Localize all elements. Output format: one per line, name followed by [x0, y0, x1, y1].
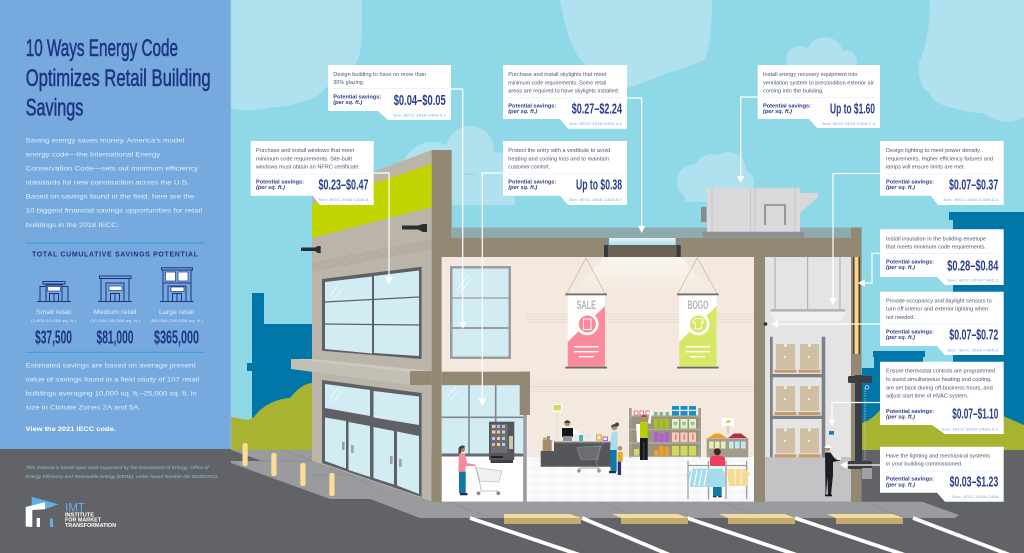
card: insulation: See: IECC 2018 C402.2 — [947, 278, 999, 282]
warehouse shelving with boxes — [770, 337, 825, 457]
card: occupancy sensors: (per sq. ft.) — [886, 335, 915, 341]
savings: large retail: Large retail — [159, 310, 194, 316]
arrow: thermostat connector — [828, 402, 880, 427]
arrow: insulation connector — [858, 253, 880, 287]
card: commissioning: Potential savings: — [886, 476, 934, 482]
card: windows: See: IECC 2018 C402.4 — [318, 197, 369, 202]
clothing racks and shopper — [685, 448, 750, 499]
card: vestibule: Protect the entry with a vestibule to avoid — [508, 148, 610, 154]
title: 10 Ways Energy Code — [26, 35, 178, 62]
customer and child with cart — [577, 422, 623, 475]
card: insulation — [880, 229, 1004, 285]
icon: small retail — [37, 282, 71, 302]
banner: bogo — [677, 258, 719, 368]
intro text: 10 biggest financial savings opportunities for retail — [26, 208, 203, 215]
card: thermostat controls: (per sq. ft.) — [886, 414, 915, 420]
banner: sale — [565, 258, 607, 368]
produce stand — [707, 418, 748, 457]
intro text: Saving energy saves money. America’s model — [26, 137, 185, 144]
card: thermostat controls: to avoid simultaneous heating and cooling, — [886, 377, 992, 383]
card: commissioning: (per sq. ft.) — [886, 482, 915, 488]
card: skylights: See: IECC 2018 C402.4.2 — [569, 121, 623, 126]
icon: thermostat — [829, 431, 834, 435]
logo: IMT: TRANSFORMATION — [65, 523, 116, 529]
bollards — [242, 443, 334, 496]
savings: large retail — [150, 310, 203, 348]
card: lighting: lamps will ensure limits are met. — [886, 164, 965, 170]
arrow: vestibule connector — [478, 173, 503, 406]
intro text — [26, 137, 203, 229]
card: glazing: (per sq. ft.) — [333, 100, 363, 106]
card: commissioning: See: IECC 2018 C408 — [952, 494, 999, 499]
savings: medium retail: Medium retail — [94, 310, 136, 316]
intro text: Based on savings found in the field, here are the — [26, 194, 195, 201]
exterior wall column with insulation — [848, 239, 872, 502]
card: glazing: Potential savings: — [333, 94, 382, 100]
card: energy recovery: Install energy recovery equipment into — [763, 72, 857, 78]
warehouse room — [754, 257, 851, 502]
card: occupancy sensors: turn off interior and exterior lighting when — [886, 307, 988, 313]
card: skylights: areas are required to have skylights installed. — [508, 88, 619, 94]
methodology text: buildings averaging 10,000 sq. ft.–25,000 sq. ft. in — [26, 390, 197, 398]
card: skylights: $0.27–$2.24 — [572, 100, 622, 117]
card: energy recovery: ventilation system to precondition exterior air — [763, 80, 874, 86]
card: windows: minimum code requirements. Site-built — [256, 156, 353, 162]
card: commissioning — [880, 447, 1004, 502]
savings: small retail: Small retail — [36, 310, 71, 316]
savings: large retail: $365,000 — [154, 328, 199, 348]
arrow: occupancy sensors connector — [771, 320, 880, 328]
banner: sale: SALE — [576, 298, 596, 312]
arrow: glazing connector — [451, 89, 466, 329]
card: thermostat controls: See: IECC 2018 C403.4.1 — [941, 426, 999, 432]
savings: small retail: $37,500 — [35, 328, 72, 348]
arrow: windows connector — [374, 173, 393, 284]
card: skylights: Purchase and install skylights that meet — [508, 72, 607, 78]
divider rule — [26, 242, 204, 244]
heading: total cumulative savings potential: TOTAL CUMULATIVE SAVINGS POTENTIAL — [32, 252, 199, 258]
card: occupancy sensors: Provide occupancy and daylight sensors to — [886, 299, 992, 305]
card: windows: windows must obtain an NFRC certificate. — [255, 164, 360, 170]
card: skylights: minimum code requirements. Some retail — [508, 80, 606, 86]
intro text: Conservation Code—sets out minimum efficiency — [26, 166, 199, 173]
arrow: commissioning connector — [840, 461, 880, 469]
building: left facade — [312, 150, 452, 502]
title — [26, 35, 211, 122]
sky background — [231, 0, 1024, 460]
ground and parking lot — [231, 450, 1024, 553]
card: commissioning: Have the lighting and mechanical systems — [886, 453, 990, 459]
card: windows: Purchase and install windows that meet — [256, 148, 355, 154]
savings: small retail: (1,000-10,000 sq. ft.) — [31, 319, 76, 323]
lower storefront window and doors — [322, 380, 422, 497]
skylight — [573, 238, 712, 293]
link text: View the 2021 IECC code. — [26, 426, 116, 433]
card: glazing: Design building to have no more than — [333, 72, 426, 78]
left panel — [0, 0, 231, 553]
card: thermostat controls: Ensure thermostat controls are programmed — [886, 369, 995, 375]
checkout counter and cashier — [541, 404, 612, 467]
card: occupancy sensors: See: IECC 2018 C405.2 — [947, 348, 999, 352]
intro text: standards for new construction across the U.S. — [26, 180, 189, 187]
card: vestibule: Up to $0.38 — [576, 176, 622, 193]
arrow: skylight connector — [627, 98, 645, 233]
parking stripes — [470, 518, 1010, 553]
skyline: distant buildings — [247, 212, 1024, 450]
card: insulation: (per sq. ft.) — [886, 265, 915, 271]
card: vestibule — [503, 141, 627, 205]
roof parapet — [441, 228, 862, 257]
vending machine — [489, 422, 514, 463]
parking curbs — [504, 514, 903, 524]
card: energy recovery — [758, 65, 880, 128]
card: insulation: that meets minimum code requirements. — [886, 245, 986, 251]
card: skylights — [503, 65, 627, 129]
footnote — [26, 465, 219, 479]
card: windows: $0.23–$0.47 — [318, 176, 368, 193]
shopper with cart — [458, 445, 502, 495]
title: Savings — [26, 94, 83, 122]
card: energy recovery: See: IECC 2018 C403.7.4 — [822, 121, 876, 126]
card: vestibule: customer comfort. — [508, 164, 550, 170]
logo: IMT — [26, 497, 116, 529]
upper storefront window — [322, 267, 422, 359]
card: energy recovery: coming into the building. — [763, 88, 824, 94]
awning — [291, 359, 432, 385]
savings: medium retail — [90, 310, 140, 348]
card: skylights: (per sq. ft.) — [508, 109, 538, 115]
footnote: Energy Efficiency and Renewable Energy (EERE), under Award Number DE-EE0007619. — [26, 474, 219, 479]
arrow: lighting connector — [829, 174, 880, 306]
arrow: energy recovery connector — [737, 97, 758, 183]
card: insulation: Install insulation in the building envelope — [886, 236, 986, 242]
banner: bogo: BOGO — [688, 298, 708, 312]
card: occupancy sensors: not needed. — [886, 315, 915, 321]
ground floor vestibule — [442, 372, 530, 502]
card: vestibule: heating and cooling loss and to maintain — [508, 156, 609, 162]
card: thermostat controls: Potential savings: — [886, 409, 934, 415]
card: lighting: (per sq. ft.) — [886, 185, 915, 191]
card: windows — [251, 141, 374, 205]
wall lamps — [301, 224, 427, 253]
sidewalk — [231, 450, 959, 518]
card: occupancy sensors: Potential savings: — [886, 330, 934, 336]
savings: large retail: (50,000-200,000 sq. ft.) — [150, 319, 203, 323]
savings: medium retail: (10,000-50,000 sq. ft.) — [90, 319, 140, 323]
store interior wall — [442, 257, 754, 457]
card: thermostat controls: are set back during off-business hours, and — [886, 385, 993, 391]
savings: small retail — [31, 310, 76, 348]
card: glazing — [328, 65, 451, 120]
card: glazing: $0.04–$0.05 — [394, 92, 446, 109]
methodology text — [26, 362, 200, 412]
employee stocking shelves — [636, 410, 652, 460]
title: Optimizes Retail Building — [26, 65, 211, 92]
savings: medium retail: $81,000 — [96, 328, 134, 348]
rooftop HVAC unit — [701, 188, 818, 238]
bushes — [231, 383, 1024, 452]
logo: IMT: FOR MARKET — [65, 518, 101, 524]
card: vestibule: Potential savings: — [508, 180, 557, 186]
second floor store window — [450, 266, 511, 359]
footnote: This material is based upon work supported by the Department of Energy, Office of — [26, 465, 210, 470]
icon: large retail — [160, 268, 194, 302]
card: skylights: Potential savings: — [508, 104, 557, 110]
store tiled floor — [527, 457, 754, 502]
card: thermostat controls: adjust start time of HVAC system. — [886, 393, 968, 399]
card: energy recovery: Potential savings: — [763, 104, 811, 110]
card: windows: Potential savings: — [256, 180, 304, 186]
card: lighting: See: IECC 2018 C405.3-4 — [943, 197, 999, 202]
card: vestibule: See: IECC 2018 C402.5.7 — [569, 197, 622, 202]
logo: IMT: INSTITUTE — [65, 512, 95, 518]
card: vestibule: (per sq. ft.) — [508, 185, 538, 191]
intro text: energy code—the International Energy — [26, 151, 161, 158]
card: insulation: Potential savings: — [886, 260, 934, 266]
card: thermostat controls — [880, 362, 1004, 434]
card: lighting — [880, 141, 1004, 205]
card: energy recovery: Up to $1.60 — [830, 100, 875, 117]
methodology text: size in Climate Zones 2A and 5A. — [26, 405, 141, 412]
methodology text: Estimated savings are based on average present — [26, 362, 196, 369]
intro text: buildings in the 2018 IECC. — [26, 222, 119, 229]
card: commissioning: in your building commissioned. — [886, 462, 963, 468]
logo: IMT: IMT — [65, 500, 86, 514]
clouds — [231, 0, 1024, 207]
grocery shelves — [629, 406, 701, 458]
card: glazing: See: IECC 2018 C402.4.1 — [393, 112, 447, 118]
inspector with hard hat — [824, 445, 841, 496]
card: lighting: requirements. Higher efficiency fixtures and — [886, 156, 993, 162]
card: glazing: 30% glazing. — [333, 80, 364, 86]
divider rule — [26, 352, 204, 353]
card: energy recovery: (per sq. ft.) — [763, 109, 792, 115]
icon: medium retail — [98, 276, 132, 302]
card: windows: (per sq. ft.) — [256, 185, 285, 191]
card: lighting: Potential savings: — [886, 180, 934, 186]
card: lighting: Design lighting to meet power density — [886, 148, 980, 154]
methodology text: value of savings found in a field study of 107 retail — [26, 376, 200, 384]
card: occupancy sensors — [880, 292, 1004, 355]
